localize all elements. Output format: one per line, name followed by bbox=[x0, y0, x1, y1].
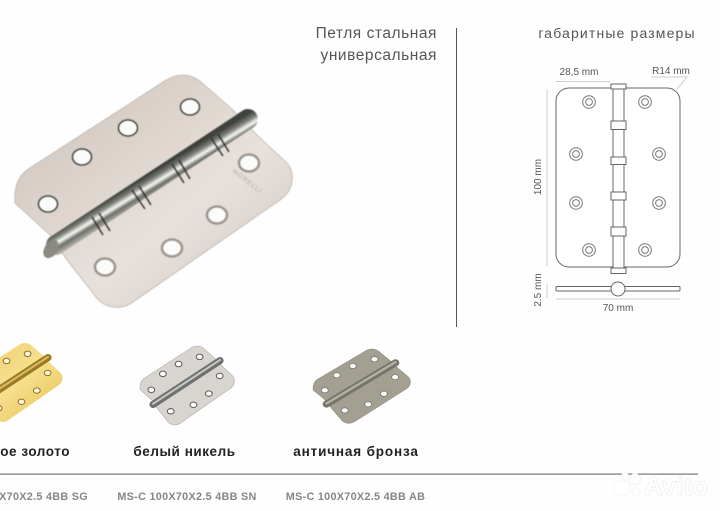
product title bbox=[316, 25, 437, 64]
product codes: MS-C 100X70X2.5 4BB SN bbox=[117, 491, 257, 503]
main hinge photo illustration bbox=[15, 75, 292, 307]
dimensions heading: габаритные размеры bbox=[538, 25, 696, 41]
hinge plate bbox=[15, 75, 292, 307]
screw holes bbox=[570, 96, 665, 256]
engraved brand mark: MORELLI bbox=[231, 168, 263, 195]
dimension labels: R14 mm bbox=[652, 66, 690, 77]
dimension leader lines bbox=[547, 77, 687, 299]
vertical divider bbox=[456, 28, 457, 327]
swatch hinge: satin gold bbox=[0, 343, 62, 422]
swatch hinge: white nickel bbox=[140, 346, 234, 425]
finish names bbox=[0, 444, 419, 459]
pin and knuckles bbox=[611, 84, 626, 274]
plate outline bbox=[556, 88, 680, 267]
horizontal rule bbox=[0, 474, 698, 475]
dimension labels: 28,5 mm bbox=[560, 67, 598, 78]
watermark: Avito bbox=[644, 471, 708, 501]
finish names: белый никель bbox=[133, 444, 236, 459]
swatch hinge: antique bronze bbox=[313, 349, 410, 423]
watermark bbox=[614, 471, 708, 501]
finish names: античная бронза bbox=[293, 444, 419, 459]
dimension labels: 2.5 mm bbox=[533, 273, 544, 307]
hinge pin barrel bbox=[40, 119, 248, 261]
dimension labels: 100 mm bbox=[533, 159, 544, 195]
dimension labels bbox=[533, 66, 690, 314]
product codes bbox=[0, 491, 425, 503]
product title: Петля стальная bbox=[316, 25, 437, 42]
screw holes bbox=[38, 99, 259, 276]
dimension labels: 70 mm bbox=[603, 303, 633, 314]
technical drawing with dimensions bbox=[533, 66, 690, 314]
product codes: MS-C 100X70X2.5 4BB AB bbox=[286, 491, 425, 503]
side view bbox=[556, 282, 680, 296]
product title: универсальная bbox=[321, 47, 437, 64]
